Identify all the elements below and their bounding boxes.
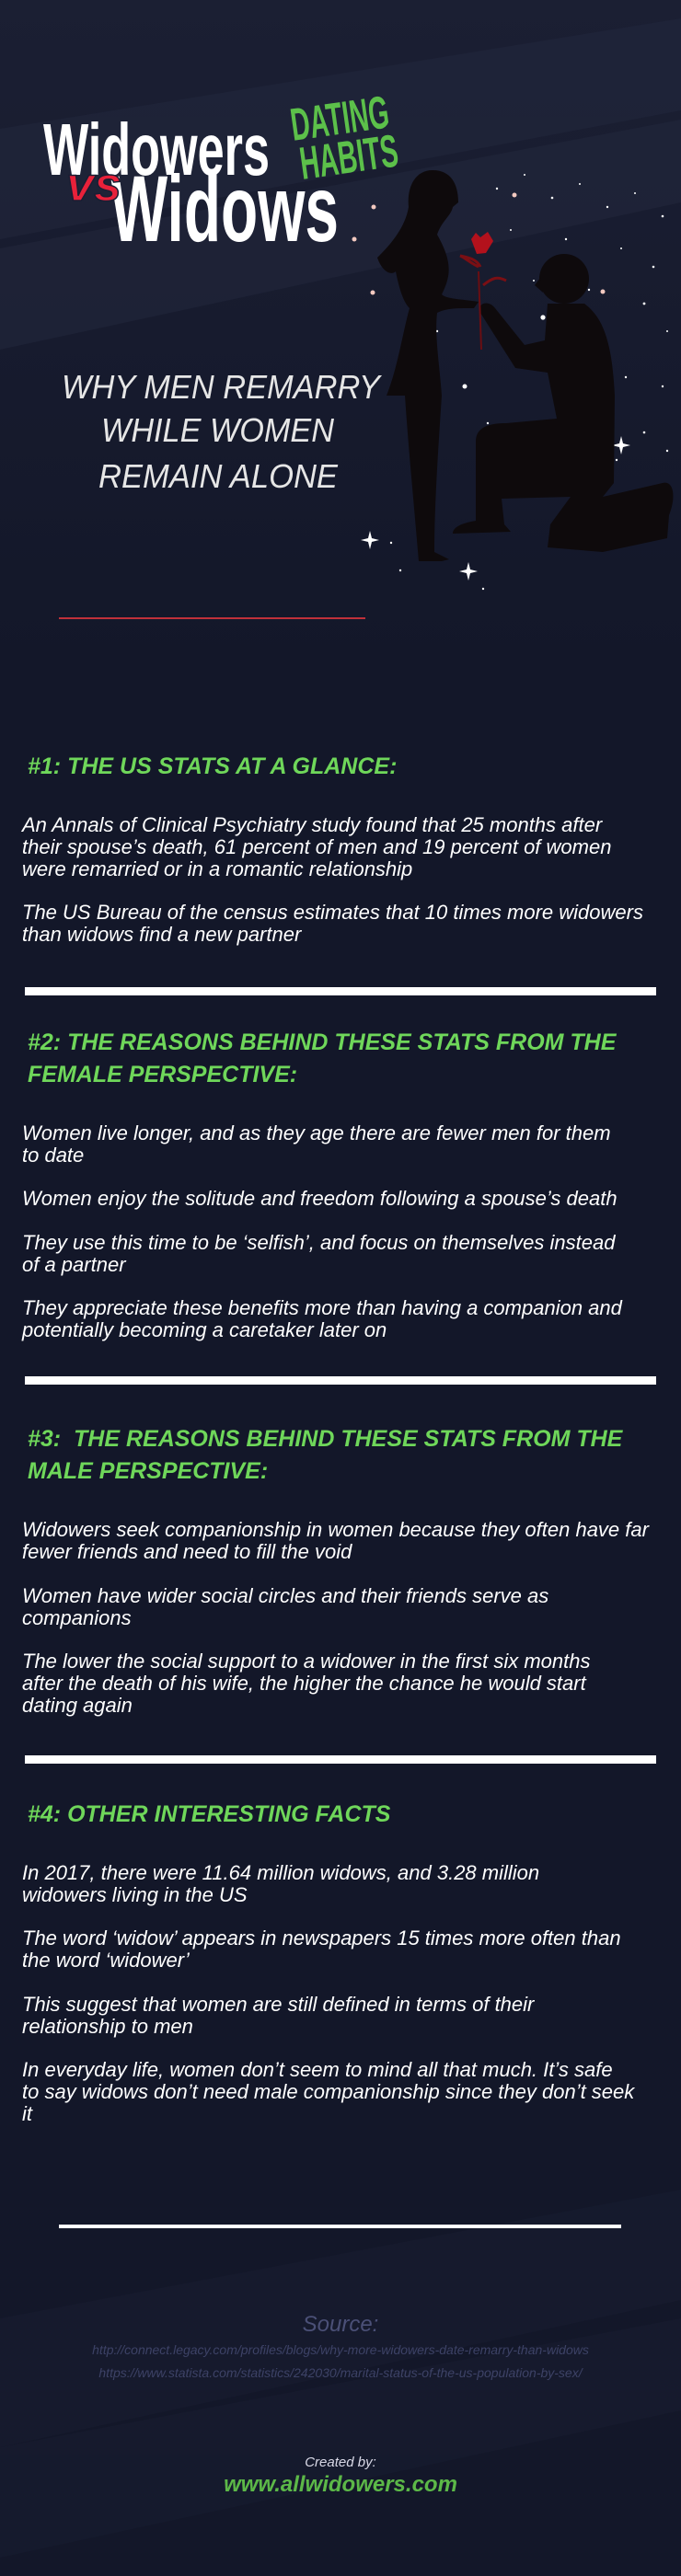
text block 1: were remarried or in a romantic relationship xyxy=(22,857,412,880)
text block 2: They appreciate these benefits more than having a companion and xyxy=(22,1296,622,1319)
heading 3: #3: THE REASONS BEHIND THESE STATS FROM THE xyxy=(28,1426,622,1452)
text block 3: Women have wider social circles and their friends serve as xyxy=(22,1584,548,1607)
heading 4: #4: OTHER INTERESTING FACTS xyxy=(28,1801,390,1827)
credit xyxy=(224,2455,457,2497)
credit: www.allwidowers.com xyxy=(224,2472,457,2497)
sources: http://connect.legacy.com/profiles/blogs/why-more-widowers-date-remarry-than-widows xyxy=(92,2342,589,2357)
text block 4: The word ‘widow’ appears in newspapers 15 times more often than xyxy=(22,1926,621,1949)
text block 3: after the death of his wife, the higher the chance he would start xyxy=(22,1672,586,1695)
text block 3: Widowers seek companionship in women because they often have far xyxy=(22,1518,649,1541)
illustration: couple silhouette with stars xyxy=(352,170,674,591)
text block 1: The US Bureau of the census estimates that 10 times more widowers xyxy=(22,901,643,924)
title: Widowers vs Widows xyxy=(43,109,339,258)
text block 3: fewer friends and need to fill the void xyxy=(22,1540,352,1563)
text block 4 xyxy=(22,1861,635,2125)
text block 3: The lower the social support to a widower in the first six months xyxy=(22,1650,591,1673)
heading 2 xyxy=(28,1029,617,1087)
text block 2: Women live longer, and as they age there are fewer men for them xyxy=(22,1121,611,1144)
text block 4: to say widows don’t need male companionship since they don’t seek xyxy=(22,2080,634,2103)
sources: Source: xyxy=(303,2312,378,2337)
text block 4: widowers living in the US xyxy=(22,1883,248,1906)
text block 2: They use this time to be ‘selfish’, and focus on themselves instead xyxy=(22,1231,615,1254)
title: dating habits xyxy=(287,86,401,184)
title: Widowers vs Widows: vs xyxy=(66,158,121,212)
text block 4: the word ‘widower’ xyxy=(22,1949,190,1972)
heading 2: FEMALE PERSPECTIVE: xyxy=(28,1062,297,1087)
heading 3: MALE PERSPECTIVE: xyxy=(28,1458,268,1484)
text block 4: In 2017, there were 11.64 million widows, and 3.28 million xyxy=(22,1861,539,1884)
subtitle xyxy=(62,368,383,495)
text block 3 xyxy=(22,1518,650,1717)
red divider under subtitle xyxy=(59,617,365,619)
credit: Created by: xyxy=(305,2455,376,2470)
text block 3: companions xyxy=(22,1606,132,1629)
text block 1: their spouse’s death, 61 percent of men and 19 percent of women xyxy=(22,835,611,858)
text block 2: potentially becoming a caretaker later on xyxy=(22,1318,387,1341)
text block 4: In everyday life, women don’t seem to mind all that much. It’s safe xyxy=(22,2058,613,2081)
text block 4: relationship to men xyxy=(22,2015,193,2038)
text block 3: dating again xyxy=(22,1694,133,1717)
heading 3 xyxy=(28,1426,623,1484)
text block 2 xyxy=(22,1121,622,1341)
subtitle: WHILE WOMEN xyxy=(101,411,335,449)
title: Widowers vs Widows: Widowers xyxy=(43,109,270,190)
sources xyxy=(92,2312,589,2380)
text block 4: This suggest that women are still defined in terms of their xyxy=(22,1993,534,2016)
text block 1 xyxy=(21,813,643,946)
woman xyxy=(377,170,479,396)
text block 4: it xyxy=(22,2102,32,2125)
text block 2: of a partner xyxy=(22,1253,126,1276)
text block 2: Women enjoy the solitude and freedom following a spouse’s death xyxy=(22,1187,618,1210)
text block 1: than widows find a new partner xyxy=(22,923,301,946)
heading 1: #1: THE US STATS AT A GLANCE: xyxy=(28,753,397,779)
man xyxy=(539,254,589,304)
text block 1: An Annals of Clinical Psychiatry study found that 25 months after xyxy=(22,813,602,836)
subtitle: WHY MEN REMARRY xyxy=(62,368,383,406)
sources: https://www.statista.com/statistics/242030/marital-status-of-the-us-population-by-sex/ xyxy=(98,2365,583,2380)
text block 2: to date xyxy=(22,1144,84,1167)
heading 2: #2: THE REASONS BEHIND THESE STATS FROM THE xyxy=(28,1029,616,1055)
subtitle: REMAIN ALONE xyxy=(98,457,339,495)
rose xyxy=(460,232,506,350)
